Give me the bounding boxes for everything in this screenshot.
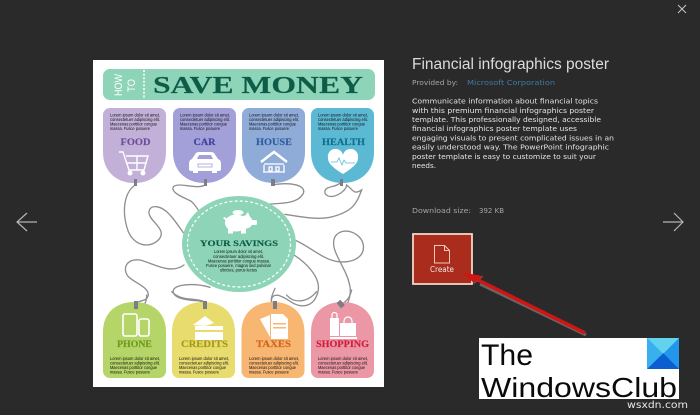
card: car [173, 108, 236, 183]
card: shopping [311, 302, 374, 378]
card: credits: CREDITS [181, 339, 228, 349]
watermark: wsxdn.com [627, 400, 688, 411]
description: Communicate information about financial topics [412, 98, 598, 106]
icon: windows tile [647, 338, 679, 369]
card: house: consectetuer adipiscing elit. [249, 117, 299, 122]
card: taxes [242, 302, 304, 378]
poster [93, 60, 384, 387]
card: taxes: massa. Fusce posuere [249, 370, 289, 374]
right arrow [663, 213, 683, 231]
card: house [242, 108, 305, 183]
savings circle [182, 196, 296, 292]
icon: tax documents [260, 314, 288, 339]
card: house: Maecenas porttitor congue [249, 122, 296, 126]
card: food [103, 108, 166, 183]
icon: car [189, 152, 221, 173]
provider line: Microsoft Corporation [467, 79, 555, 87]
card: food: FOOD [120, 137, 151, 147]
card: phone: consectetuer adipiscing elit. [110, 360, 160, 366]
card: taxes: Lorem ipsum dolor sit amet, [249, 356, 299, 361]
savings circle: Fusce posuere, magna sed pulvinar [206, 263, 271, 268]
card: food: consectetuer adipiscing elit. [110, 117, 160, 122]
card: credits [172, 302, 235, 378]
card: taxes: TAXES [256, 339, 291, 349]
card: credits: Maecenas porttitor congue [179, 365, 226, 370]
strings [124, 182, 363, 312]
description: easily understood way. The PowerPoint infographic [412, 144, 609, 152]
card: car: CAR [194, 137, 216, 147]
card: phone: Lorem ipsum dolor sit amet, [110, 356, 160, 361]
description: poster template is easy to customize to suit your [412, 153, 596, 161]
create button [413, 234, 472, 284]
card: phone: PHONE [117, 339, 152, 349]
savings circle: ultricies, purus lectus [220, 268, 258, 272]
card: shopping: Maecenas porttitor congue [318, 365, 365, 370]
provider line: Provided by: [412, 79, 458, 87]
description: with this premium financial infographics poster [412, 107, 594, 115]
card: phone: massa. Fusce posuere [110, 370, 150, 374]
card: credits: Lorem ipsum dolor sit amet, [179, 356, 229, 361]
The Windows Club logo: WindowsClub [481, 372, 677, 403]
card: phone [103, 302, 166, 378]
description: engaging visuals to present complicated issues in an [412, 134, 614, 142]
card: health: consectetuer adipiscing elit. [318, 117, 368, 122]
download size: Download size: [412, 207, 471, 215]
card: food: massa. Fusce posuere [110, 126, 150, 131]
poster title band [103, 69, 375, 100]
download size: 392 KB [479, 207, 504, 215]
description: template. This professionally designed, accessible [412, 116, 601, 124]
card: taxes: Maecenas porttitor congue [249, 365, 296, 370]
description [412, 98, 614, 170]
icon: phone and tablet [123, 314, 149, 336]
icon: shopping bags [330, 312, 357, 339]
card: car: consectetuer adipiscing elit. [180, 117, 230, 122]
card: car: Lorem ipsum dolor sit amet, [180, 112, 230, 118]
card: health: Lorem ipsum dolor sit amet, [318, 112, 368, 118]
heading: Financial infographics poster [412, 56, 609, 73]
card: credits: consectetuer adipiscing elit. [179, 360, 229, 366]
card: shopping: massa. Fusce posuere [318, 370, 358, 374]
icon: piggy bank [223, 210, 257, 234]
card: shopping: Lorem ipsum dolor sit amet, [318, 356, 368, 361]
poster title band: TO [126, 79, 138, 92]
savings circle: Lorem ipsum dolor sit amet, [214, 249, 263, 254]
provider line [412, 79, 555, 87]
card: health: Maecenas porttitor congue [318, 122, 365, 126]
card: house: Lorem ipsum dolor sit amet, [249, 112, 299, 118]
The Windows Club logo [479, 338, 679, 403]
icon: cart [119, 152, 148, 175]
card: health: HEALTH [322, 137, 365, 147]
card clips bottom [134, 300, 345, 309]
download size [412, 207, 504, 215]
icon: heart [328, 149, 358, 174]
icon: house [261, 152, 287, 172]
card clips top [134, 179, 343, 186]
description: financial infographics poster template uses [412, 125, 577, 133]
left arrow [17, 213, 37, 231]
card: car: Maecenas porttitor congue [180, 122, 227, 126]
card: food: Maecenas porttitor congue [110, 122, 157, 126]
card: shopping: SHOPPING [316, 339, 369, 349]
icon: document [434, 246, 450, 263]
The Windows Club logo: The [481, 339, 533, 372]
savings circle: consectetuer adipiscing elit. [213, 254, 264, 259]
card: car: massa. Fusce posuere [180, 126, 220, 131]
icon: credit cards [193, 316, 223, 340]
description: needs. [412, 162, 436, 170]
card: health [311, 108, 374, 183]
card: shopping: consectetuer adipiscing elit. [318, 360, 368, 366]
poster title band: HOW [113, 74, 125, 96]
card: phone: Maecenas porttitor congue [110, 365, 157, 370]
card: taxes: consectetuer adipiscing elit. [249, 360, 299, 366]
card: house: HOUSE [256, 137, 292, 147]
card: health: massa. Fusce posuere [318, 126, 358, 131]
create button: Create [430, 265, 454, 274]
savings circle: YOUR SAVINGS [200, 238, 278, 248]
card: credits: massa. Fusce posuere [179, 370, 219, 374]
card: house: massa. Fusce posuere [249, 126, 289, 131]
red arrow [462, 272, 586, 335]
poster title band: SAVE MONEY [153, 73, 363, 99]
savings circle: Maecenas porttitor congue massa. [208, 258, 270, 264]
close icon [678, 5, 686, 13]
card: food: Lorem ipsum dolor sit amet, [110, 112, 160, 118]
